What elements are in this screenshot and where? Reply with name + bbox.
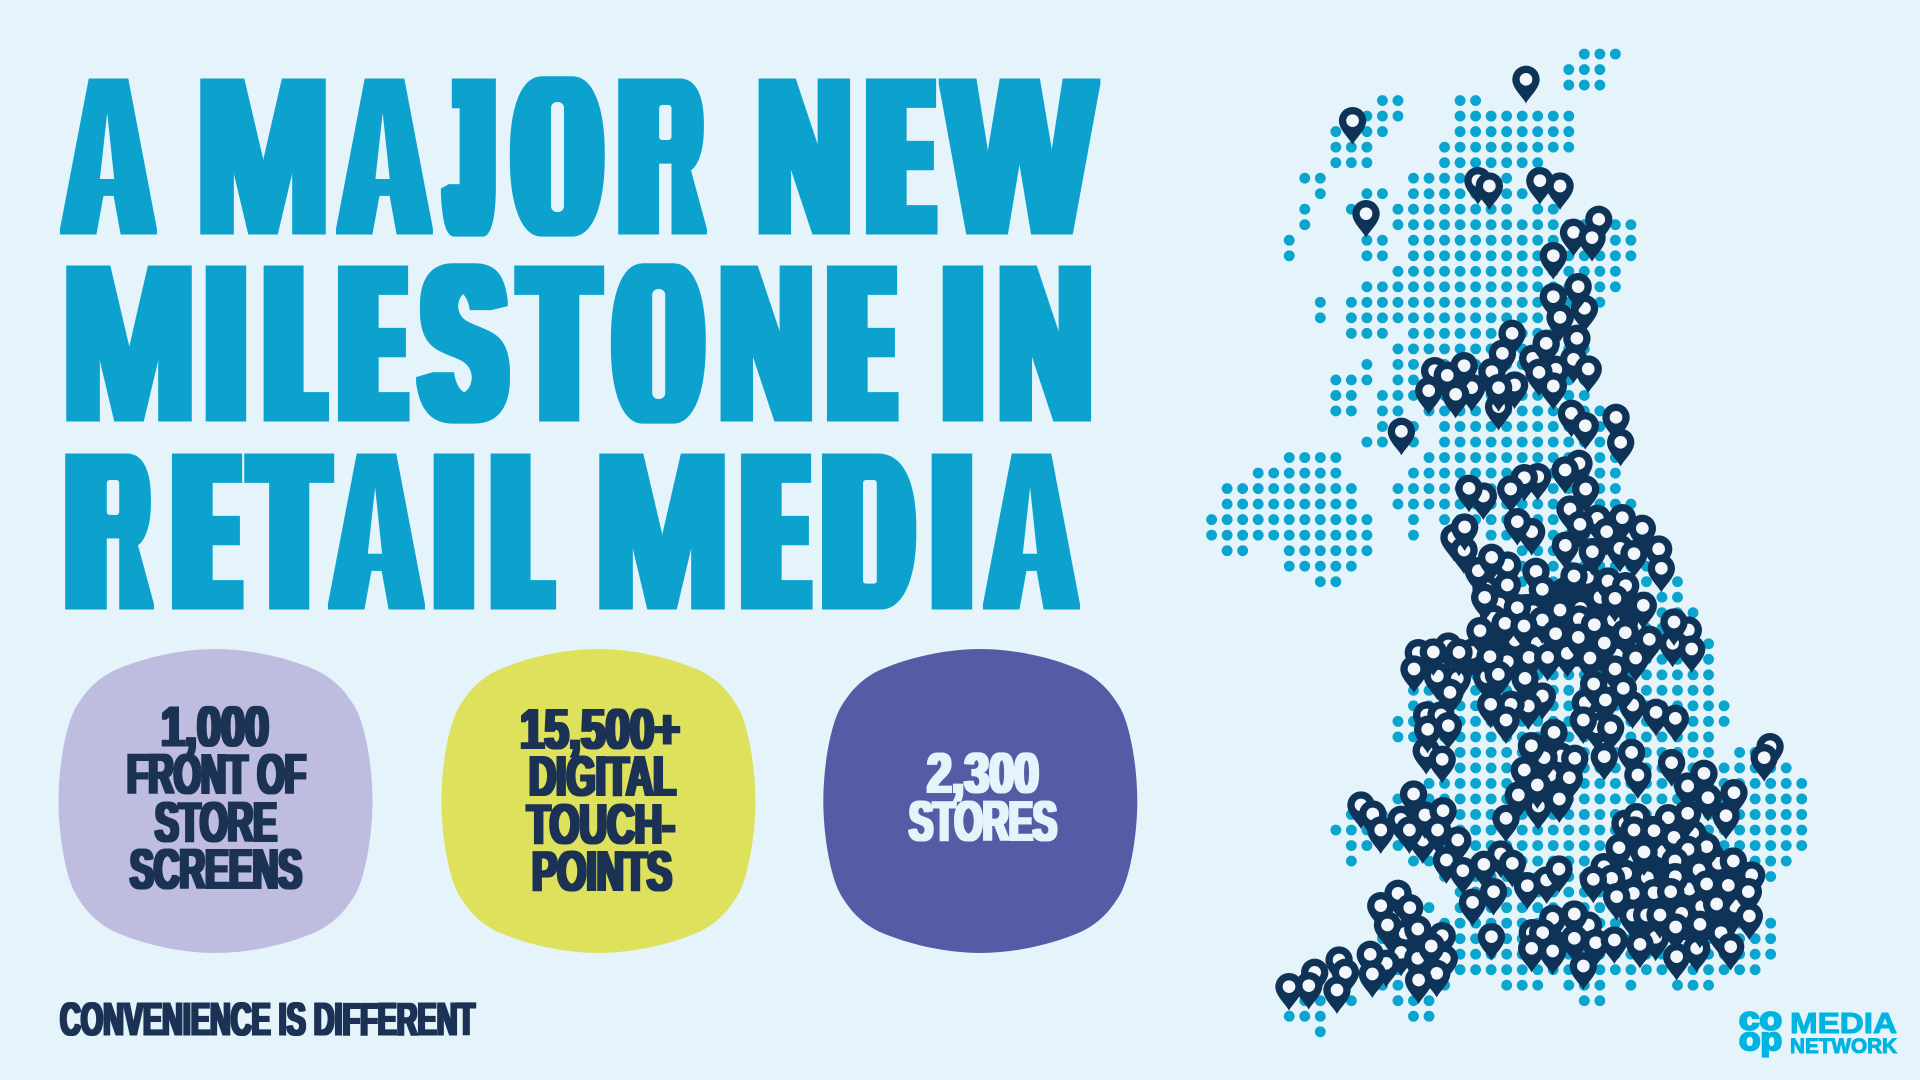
logo mark: co op	[1739, 1000, 1782, 1057]
stat: 2,300 stores	[909, 742, 1057, 854]
title line 2: L	[274, 220, 316, 466]
title line 1: A	[343, 33, 426, 279]
stat: 15,500+ digital touch-points: 15,500+	[520, 698, 680, 762]
title line 2: M	[62, 220, 196, 466]
pins: south west and Wales	[1275, 732, 1784, 1014]
title line 3: M	[595, 408, 729, 654]
title line 2	[62, 220, 1092, 466]
logo mark: co op: op	[1739, 1021, 1782, 1057]
panel: lilac stat blob	[58, 649, 372, 953]
title line 3: A	[335, 408, 418, 654]
title line 2: T	[525, 220, 593, 466]
stat: 1,000 front of store screens: 1,000	[161, 695, 269, 759]
panel: yellow stat blob	[441, 649, 755, 953]
panel: purple stat blob	[823, 649, 1137, 953]
logo mark: co op: co	[1739, 1000, 1782, 1036]
stat: 1,000 front of store screens: SCREENS	[130, 838, 302, 902]
title line 1: O	[521, 33, 594, 279]
title line 1: N	[758, 33, 851, 279]
stat: 15,500+ digital touch-points: POINTS	[532, 840, 672, 904]
title line 2: N	[999, 220, 1091, 466]
title line 1: E	[876, 33, 925, 279]
pins: south east cluster	[1492, 771, 1765, 990]
title line 2: S	[423, 220, 505, 466]
title line 3: E	[182, 408, 231, 654]
title line 2: N	[720, 220, 813, 466]
title line 1: M	[196, 33, 330, 279]
logo wordmark: MEDIA	[1790, 1008, 1897, 1040]
logo: co-op media network	[1739, 1000, 1898, 1058]
stat: 15,500+ digital touch-points	[520, 698, 680, 904]
title line 3: D	[830, 408, 906, 654]
title line 3: I	[936, 408, 967, 654]
dot map of the UK and Ireland	[1212, 54, 1802, 1032]
title line 1	[60, 33, 1100, 279]
title line 3: R	[74, 408, 141, 654]
stat: 2,300 stores: STORES	[909, 790, 1057, 854]
title line 1: W	[946, 33, 1093, 279]
title letter counters	[100, 102, 1038, 610]
title	[60, 33, 1100, 654]
title line 2: I	[947, 220, 979, 466]
stat: 1,000 front of store screens: STORE	[155, 790, 277, 854]
title line 2: O	[622, 220, 695, 466]
title line 3: E	[750, 408, 800, 654]
title line 1: A	[67, 33, 150, 279]
tagline: CONVENIENCE IS DIFFERENT	[60, 993, 475, 1045]
title line 1: J	[454, 33, 486, 279]
pins: Scotland and north	[1339, 66, 1634, 502]
stat: 1,000 front of store screens	[127, 695, 306, 902]
title line 3: A	[990, 408, 1073, 654]
stat: 1,000 front of store screens: FRONT OF	[127, 742, 306, 806]
stat: 15,500+ digital touch-points: DIGITAL	[529, 744, 676, 808]
map pins: store locations	[1275, 66, 1784, 1014]
logo wordmark	[1790, 1008, 1898, 1058]
title line 3: I	[438, 408, 469, 654]
title line 3: L	[501, 408, 543, 654]
title line 3: T	[255, 408, 323, 654]
title line 3	[65, 408, 1080, 654]
title line 2: E	[348, 220, 398, 466]
title line 2: E	[837, 220, 886, 466]
stat: 15,500+ digital touch-points: TOUCH-	[527, 792, 675, 856]
title line 1: R	[627, 33, 694, 279]
stat: 2,300 stores: 2,300	[927, 742, 1039, 806]
title line 2: I	[210, 220, 242, 466]
logo wordmark: NETWORK	[1790, 1034, 1898, 1058]
pins: northern England and Midlands cluster	[1400, 475, 1705, 756]
